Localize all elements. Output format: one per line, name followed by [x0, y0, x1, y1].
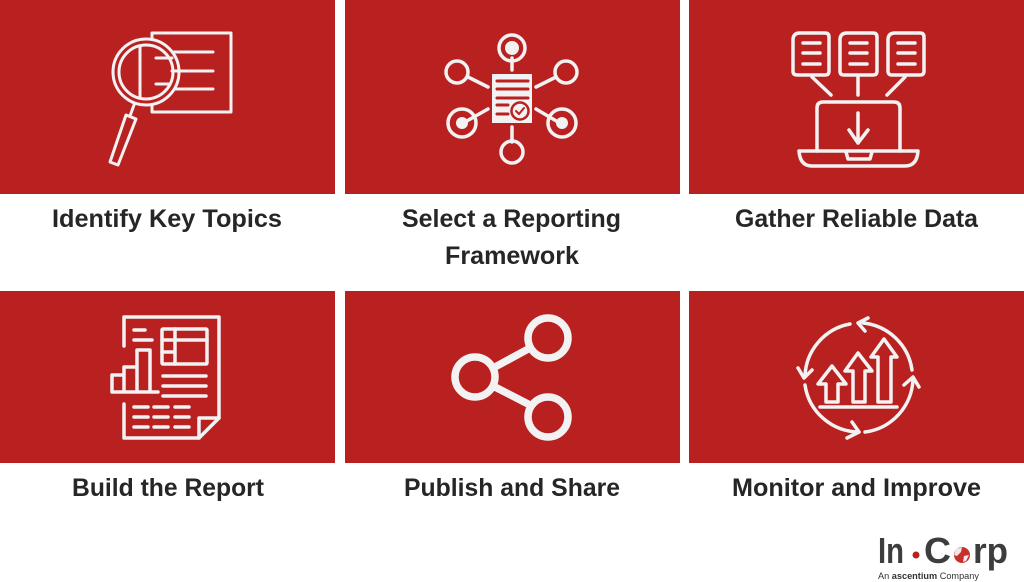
icon: magnifying glass over document: [110, 33, 231, 165]
panel: identify key topics: [0, 0, 335, 194]
heading: select a reporting framework: Select a Reporting: [402, 205, 621, 233]
heading: identify key topics: Identify Key Topics: [52, 205, 282, 233]
logo: InCorp: An ascentium Company: [878, 571, 979, 582]
heading: monitor and improve: Monitor and Improve: [732, 474, 981, 502]
icon: framework network: [446, 35, 577, 163]
icon: report page with charts: [112, 317, 219, 438]
heading: select a reporting framework: Framework: [445, 242, 579, 270]
heading: select a reporting framework: [402, 205, 621, 270]
icon: documents into laptop: [793, 33, 924, 166]
icon: share nodes: [455, 318, 568, 437]
panel: publish and share: [345, 291, 680, 463]
panel: gather reliable data: [689, 0, 1024, 194]
icon: growth arrows in cycle: [798, 318, 919, 438]
panel: monitor and improve: [689, 291, 1024, 463]
heading: build the report: Build the Report: [72, 474, 265, 502]
panel: select a reporting framework: [345, 0, 680, 194]
logo: InCorp: rp: [973, 530, 1008, 571]
logo: InCorp: [878, 530, 1008, 582]
heading: publish and share: Publish and Share: [404, 474, 620, 502]
panel: build the report: [0, 291, 335, 463]
logo: InCorp: C: [924, 530, 951, 571]
logo: InCorp: In: [878, 530, 904, 571]
heading: gather reliable data: Gather Reliable Data: [735, 205, 979, 233]
